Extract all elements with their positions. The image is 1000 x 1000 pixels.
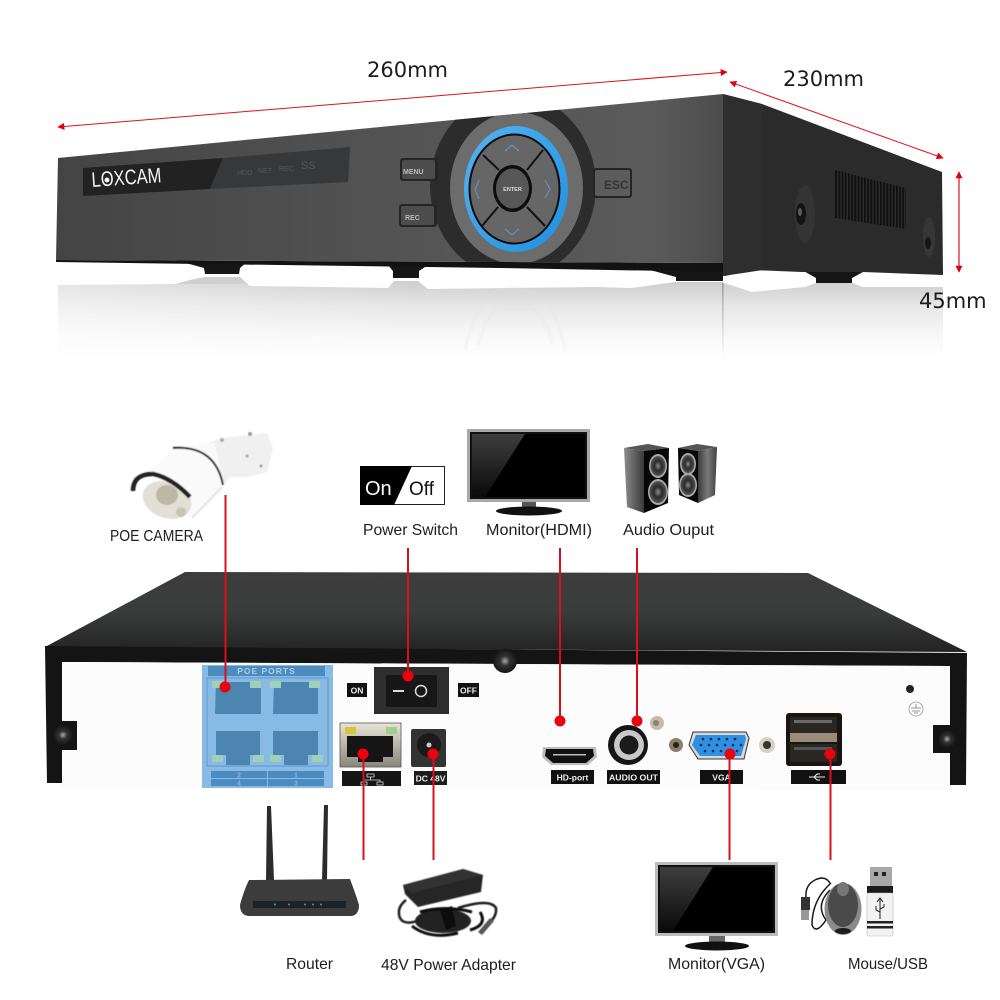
status display: NET xyxy=(258,168,273,175)
poe numbers: 2 xyxy=(237,772,241,780)
dc label xyxy=(414,771,447,785)
vga label: VGA xyxy=(712,772,731,782)
connector: hdmi xyxy=(554,548,566,726)
recorder feet xyxy=(175,260,863,283)
esc button: ESC xyxy=(604,178,629,192)
power adapter icon xyxy=(399,869,496,935)
hdmi label xyxy=(551,770,594,784)
label: mouse usb: Mouse/USB xyxy=(848,956,928,973)
logo band xyxy=(83,158,223,196)
on label: ON xyxy=(351,686,363,696)
esc button xyxy=(593,168,632,198)
side vent xyxy=(835,170,906,229)
poe numbers: 1 xyxy=(294,772,298,780)
logo band: LOXCAM xyxy=(91,164,162,192)
connector: audio xyxy=(632,548,642,726)
poe numbers: 4 xyxy=(237,780,241,788)
hdmi monitor icon xyxy=(467,429,590,516)
on off switch icon xyxy=(360,466,444,505)
reflection under recorder xyxy=(58,277,943,360)
camera icon xyxy=(133,432,273,525)
centre screw xyxy=(493,649,517,673)
label: power adapter: 48V Power Adapter xyxy=(381,957,517,974)
label: audio output: Audio Ouput xyxy=(623,522,715,539)
poe leds xyxy=(212,681,323,762)
status display: HDD xyxy=(237,170,252,177)
right tab screw xyxy=(938,730,956,748)
dimension: width: 260mm xyxy=(367,58,448,82)
label: power switch: Power Switch xyxy=(363,522,458,539)
dimension: height: 45mm xyxy=(919,289,987,313)
off label: OFF xyxy=(460,686,477,696)
label: poe camera: POE CAMERA xyxy=(110,528,203,545)
dc jack xyxy=(411,729,446,767)
usb label xyxy=(791,770,846,784)
connector: camera to poe xyxy=(220,495,230,692)
rear lid xyxy=(45,572,967,652)
white panel xyxy=(60,662,950,790)
lan port xyxy=(340,723,401,767)
control wheel: ENTER xyxy=(503,187,522,193)
vga monitor icon xyxy=(655,862,778,950)
connector: lan to router xyxy=(358,748,368,860)
audio jack xyxy=(608,725,648,765)
dc label: DC 48V xyxy=(416,774,446,784)
recorder rear view xyxy=(45,572,967,790)
status display: SS xyxy=(301,160,316,172)
on label xyxy=(347,683,367,697)
connector: power switch xyxy=(402,548,414,682)
usb ports xyxy=(786,713,842,766)
poe sockets xyxy=(215,682,318,765)
control wheel xyxy=(430,110,596,262)
router icon xyxy=(240,805,359,916)
audio label: AUDIO OUT xyxy=(609,772,659,782)
connector: vga to monitor xyxy=(724,748,736,860)
poe numbers xyxy=(211,771,324,788)
connector: usb to mouse xyxy=(824,748,836,860)
dimension: width xyxy=(58,58,727,127)
hdmi label: HD-port xyxy=(557,772,588,782)
power switch xyxy=(374,667,449,714)
status display: REC xyxy=(279,166,294,173)
recorder front view xyxy=(56,94,943,283)
connector: dc to adapter xyxy=(428,748,438,860)
status display xyxy=(210,147,350,189)
poe header: POE PORTS xyxy=(237,666,296,676)
menu button: MENU xyxy=(403,169,424,176)
side panel xyxy=(723,94,943,276)
label: router: Router xyxy=(286,956,334,973)
side screw right xyxy=(923,217,935,257)
hdmi port xyxy=(542,747,597,765)
off label xyxy=(458,683,479,697)
speakers icon xyxy=(624,444,717,513)
dimension: depth xyxy=(730,67,943,158)
label: monitor hdmi: Monitor(HDMI) xyxy=(486,522,592,539)
label: monitor vga: Monitor(VGA) xyxy=(668,956,765,973)
on off switch icon: On xyxy=(365,478,392,500)
front panel xyxy=(56,94,723,278)
rec button xyxy=(399,204,437,227)
indicator hole xyxy=(906,685,914,693)
rear frame xyxy=(45,646,967,785)
ground symbol xyxy=(909,702,923,716)
dimension: depth: 230mm xyxy=(783,67,864,91)
rec button: REC xyxy=(405,215,420,222)
vga port xyxy=(669,732,775,759)
audio label xyxy=(607,770,660,784)
vga label xyxy=(700,770,743,784)
ground screw xyxy=(650,716,664,730)
left tab screw xyxy=(53,725,73,745)
on off switch icon: Off xyxy=(409,479,435,500)
menu button xyxy=(400,158,438,181)
side screw left xyxy=(795,185,815,243)
mouse and usb icon xyxy=(801,867,893,936)
lan label xyxy=(342,771,401,786)
poe ports block xyxy=(202,665,333,788)
poe numbers: 3 xyxy=(294,780,298,788)
